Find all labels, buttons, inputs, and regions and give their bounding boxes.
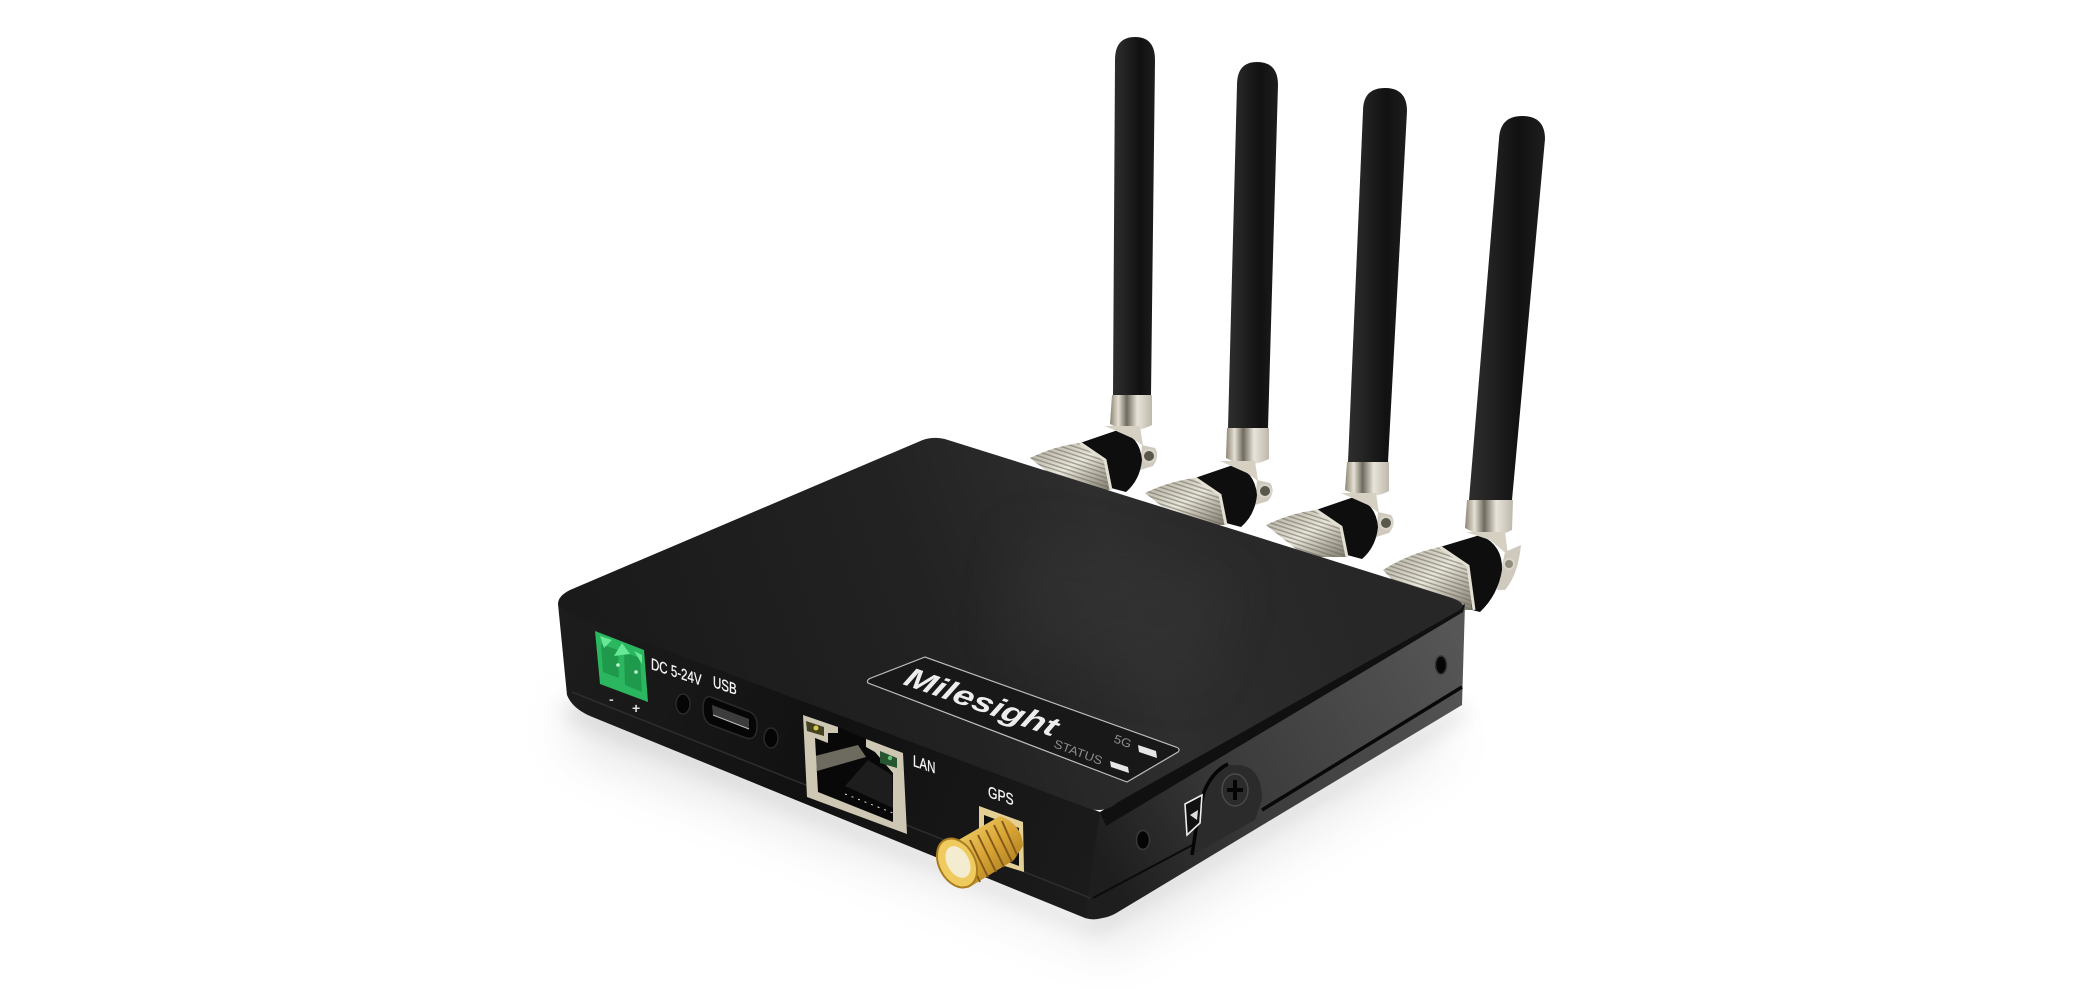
label: 5G: 5G <box>1112 732 1133 751</box>
label: USB: USB <box>713 673 737 699</box>
router body <box>558 438 1465 919</box>
label: DC 5-24V: DC 5-24V <box>651 655 702 690</box>
antenna 3 <box>1266 88 1407 559</box>
LED: status <box>1110 761 1129 773</box>
antenna 2 <box>1145 62 1278 527</box>
floor shadow <box>565 700 1465 950</box>
side bracket with screw <box>1192 764 1262 855</box>
label: LAN: LAN <box>913 752 935 778</box>
LED: 5G <box>1138 745 1157 758</box>
label: STATUS: STATUS <box>1052 737 1104 768</box>
top face sheen <box>1000 530 1240 690</box>
side face <box>1085 604 1465 919</box>
top face <box>558 438 1463 810</box>
antenna 4 <box>1383 116 1545 612</box>
hole right <box>764 728 778 748</box>
hole: side front <box>1136 830 1150 850</box>
base groove front <box>572 692 1090 898</box>
label: GPS: GPS <box>988 784 1014 810</box>
GPS SMA connector <box>929 806 1024 894</box>
antenna 1 <box>1030 37 1157 492</box>
side slot <box>1262 687 1462 810</box>
logo plate <box>867 657 1179 782</box>
front face <box>558 604 1110 919</box>
LAN port <box>803 715 907 834</box>
chamfer <box>1100 604 1465 826</box>
label: plus: + <box>632 700 640 716</box>
arrow tab label <box>1185 795 1202 835</box>
logo text: Milesight: Milesight <box>899 662 1066 743</box>
USB-C port <box>703 697 757 739</box>
hole left <box>676 694 690 714</box>
label: minus: - <box>609 691 614 707</box>
power connector <box>595 631 648 702</box>
hole: side rear <box>1436 656 1446 674</box>
